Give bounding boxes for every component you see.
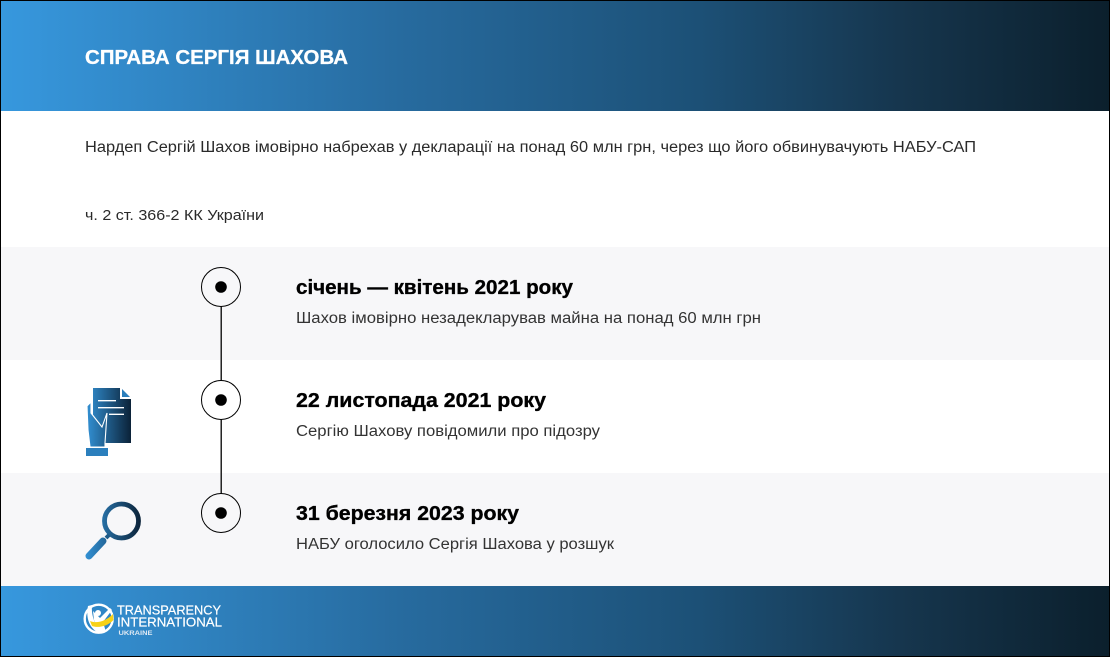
timeline marker 2 [202,380,240,420]
intro text: Нардеп Сергій Шахов імовірно набрехав у декларації на понад 60 млн грн, через що його обвинувачують НАБУ-САП [85,139,976,156]
Transparency International Ukraine logo: UKRAINE [118,630,153,637]
event 2 description: Сергію Шахову повідомили про підозру [296,423,600,440]
event 3 date: 31 березня 2023 року [296,502,520,525]
event 1 date: січень — квітень 2021 року [296,276,574,299]
header band [0,0,1110,111]
event 2 date: 22 листопада 2021 року [296,389,547,412]
event 1 [296,276,761,327]
Transparency International Ukraine logo [85,604,222,637]
footer band [0,586,1110,657]
icon: hand holding document [86,388,131,456]
title: СПРАВА СЕРГІЯ ШАХОВА [85,46,348,69]
timeline marker 1 [202,268,240,306]
event 2 [296,389,600,440]
timeline marker 3 [202,494,240,532]
logo wordmark: TRANSPARENCY [117,604,222,618]
row background: event 1 [0,247,1110,360]
event 1 description: Шахов імовірно незадекларував майна на понад 60 млн грн [296,310,761,327]
icon: magnifying glass [89,504,138,556]
legal article reference: ч. 2 ст. 366-2 КК України [85,207,264,224]
row background: event 3 [0,473,1110,586]
Transparency International Ukraine logo: INTERNATIONAL [117,616,222,630]
event 3 [296,502,614,553]
event 3 description: НАБУ оголосило Сергія Шахова у розшук [296,536,614,553]
timeline [202,268,240,532]
logo emblem [85,605,114,633]
